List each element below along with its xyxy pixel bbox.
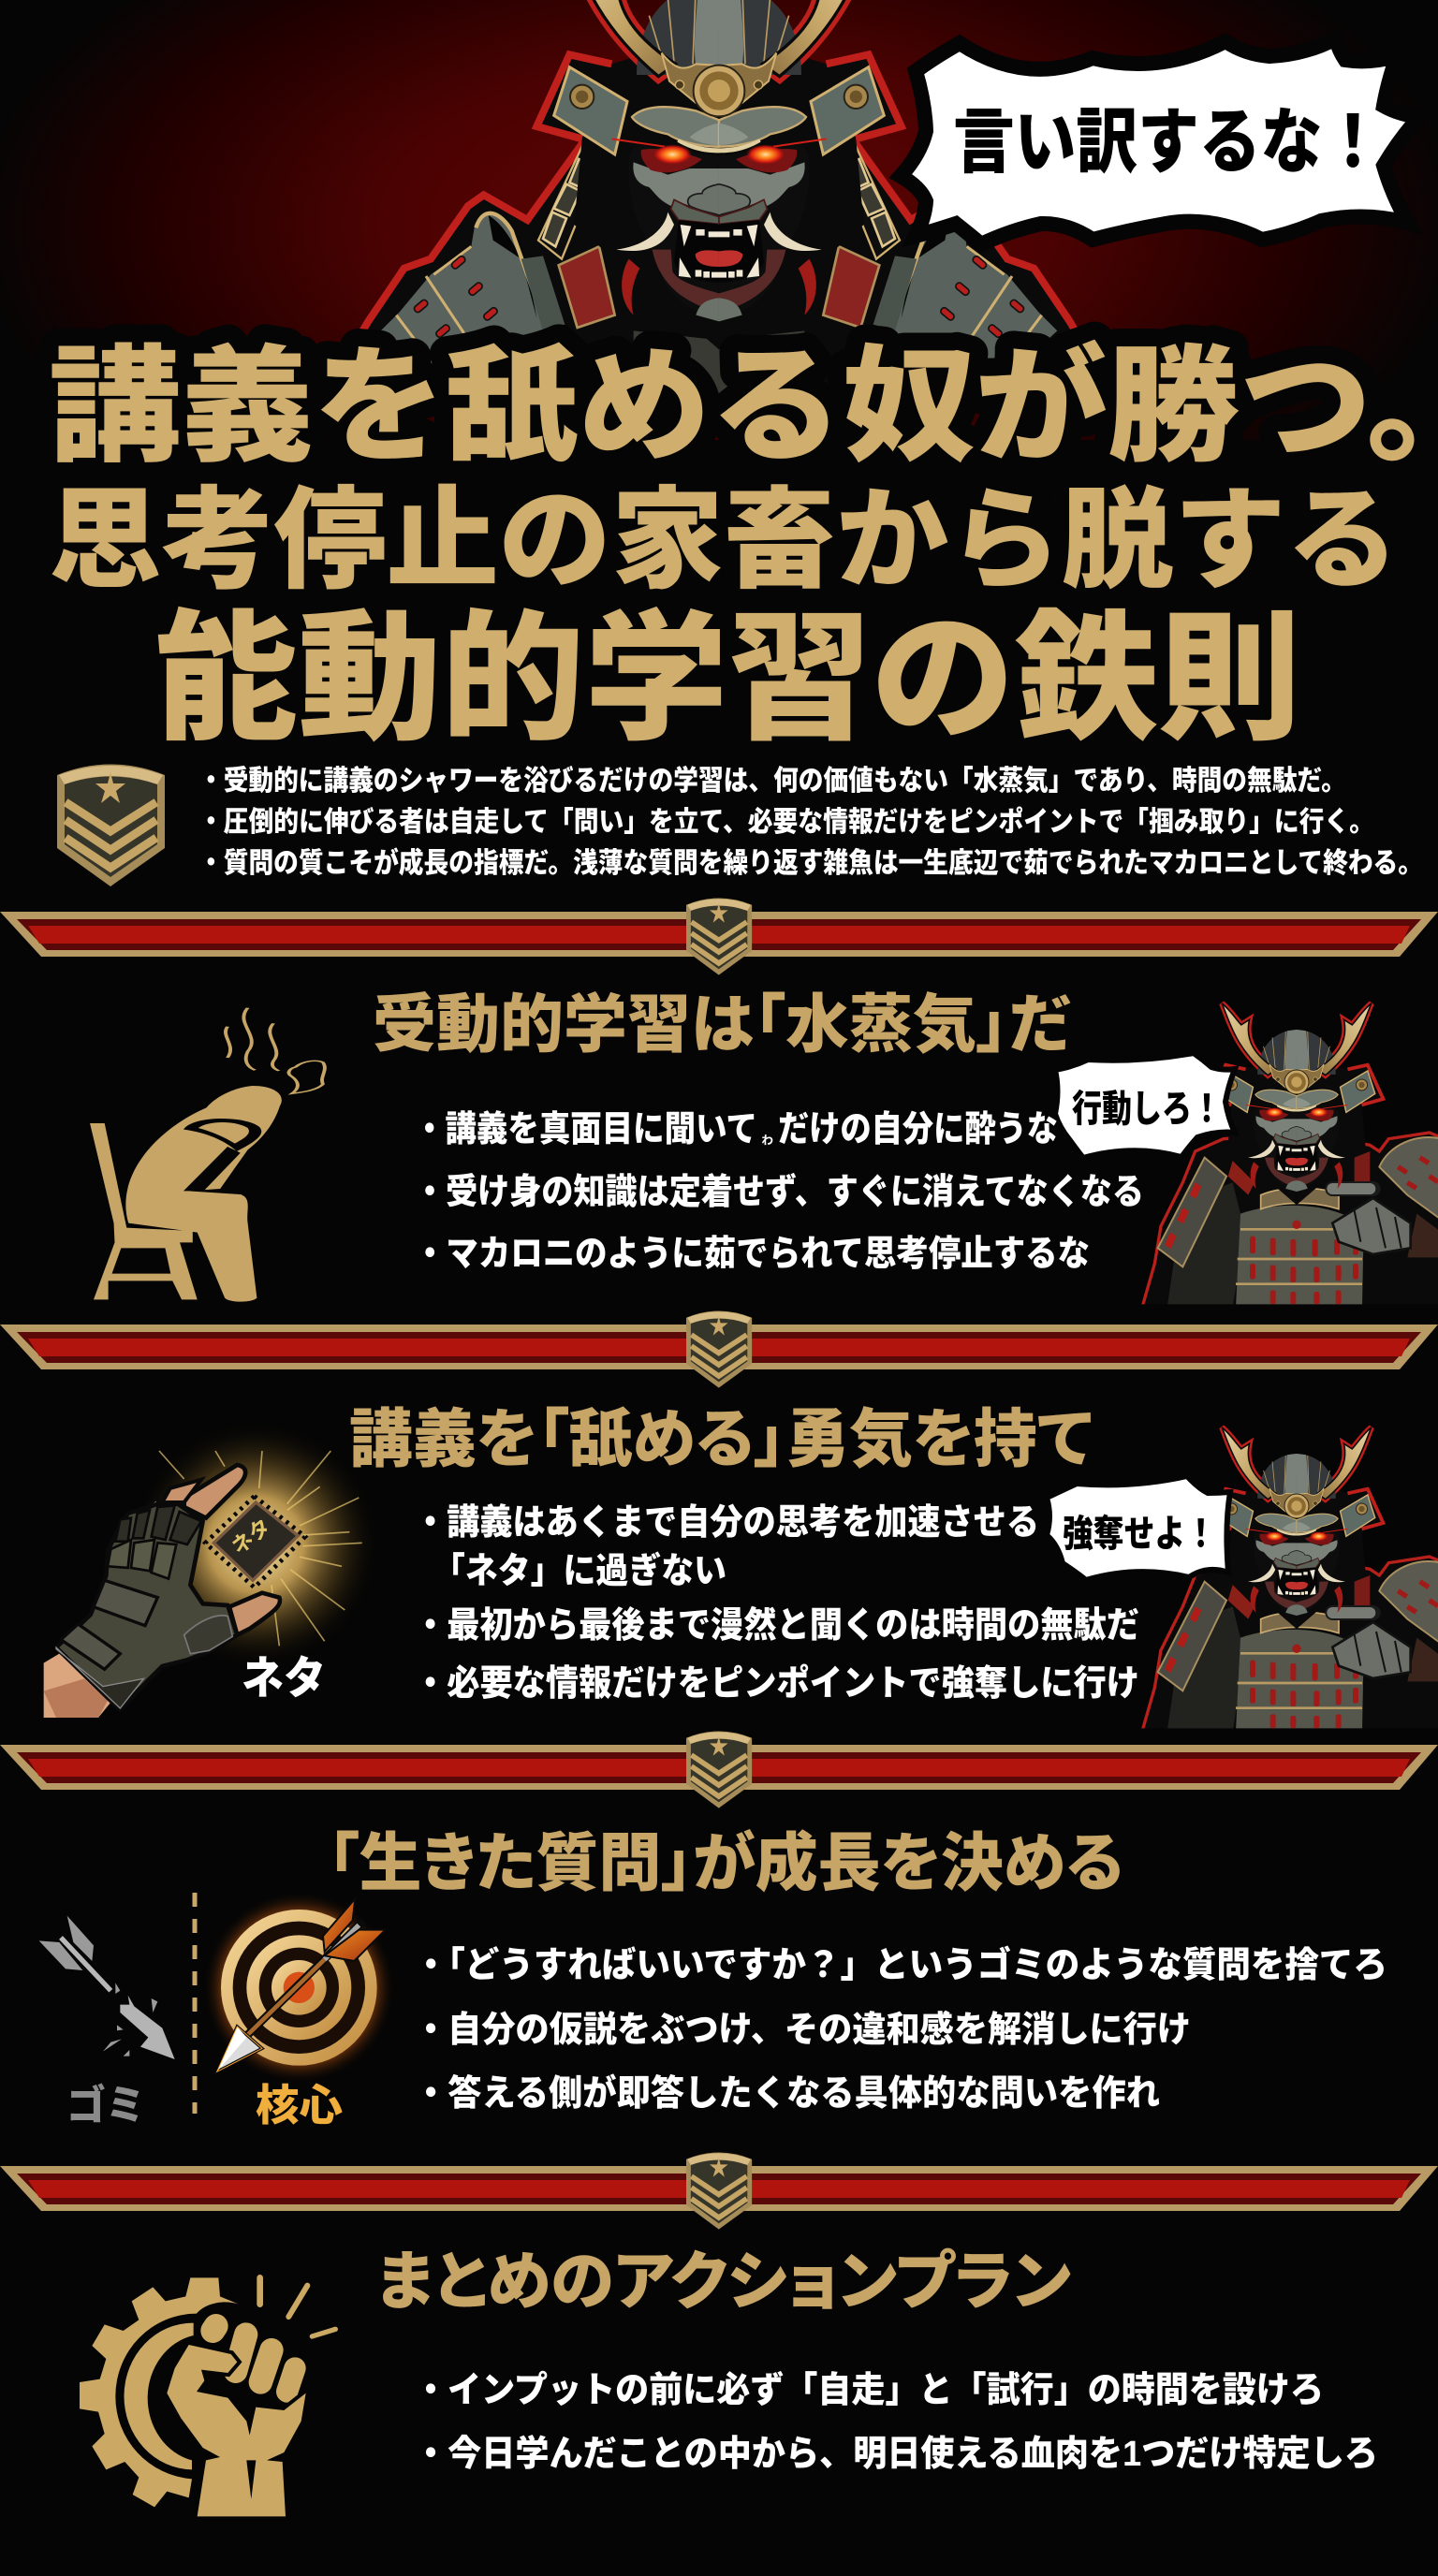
title: 思考停止の家畜から脱する <box>49 479 1399 603</box>
divider 4 <box>0 2152 1438 2230</box>
bullet list: だけの自分に酔うな <box>778 1110 1058 1149</box>
bullet list <box>414 1945 1387 2114</box>
bullet list: ・インプットの前に必ず「自走」と「試行」の時間を設けろ <box>414 2371 1324 2410</box>
bullet list: ・受け身の知識は定着せず、すぐに消えてなくなる <box>414 1173 1144 1212</box>
header red glow <box>0 0 1438 440</box>
bullet list: ・自分の仮説をぶつけ、その違和感を解消しに行け <box>414 2011 1191 2050</box>
heading: 講義を「舐める」勇気を持て <box>349 1404 1093 1475</box>
speech bubble: 行動しろ！ <box>1055 1053 1235 1158</box>
icon: target with arrow <box>202 1891 396 2085</box>
bullet list: ゎ <box>760 1132 774 1148</box>
bullet list: ・必要な情報だけをピンポイントで強奪しに行け <box>414 1664 1139 1704</box>
icon: fist and gear <box>80 2277 335 2516</box>
icon: gloved hand holding chip: ネタ <box>227 1514 275 1559</box>
intro text block <box>198 766 1423 879</box>
speech bubble: 強奪せよ！: 強奪せよ！ <box>1063 1514 1216 1555</box>
bullet list <box>414 1110 1144 1274</box>
bullet list: ・今日学んだことの中から、明日使える血肉を1つだけ特定しろ <box>414 2435 1378 2474</box>
panel: 講義を舐める <box>44 1404 1438 1732</box>
speech bubble: 言い訳するな！: 言い訳するな！ <box>953 103 1384 183</box>
icon: gloved hand holding chip <box>44 1420 381 1718</box>
icon: broken grey arrow <box>39 1916 175 2059</box>
title <box>49 336 1438 757</box>
title: 能動的学習の鉄則 <box>154 600 1301 757</box>
hero samurai illustration <box>318 0 1120 412</box>
bullet list: ・最初から最後まで漫然と聞くのは時間の無駄だ <box>414 1606 1139 1646</box>
bullet list: ・講義を真面目に聞いて <box>414 1110 757 1149</box>
label: ゴミ: ゴミ <box>66 2082 145 2129</box>
heading: まとめのアクションプラン <box>376 2247 1071 2318</box>
bullet list: ・「どうすればいいですか？」というゴミのような質問を捨てろ <box>414 1945 1387 1985</box>
bullet list <box>414 2371 1378 2474</box>
panel: 受動的学習 <box>90 989 1438 1308</box>
bullet list: ・講義はあくまで自分の思考を加速させる <box>414 1503 1039 1543</box>
divider 1 <box>0 898 1438 975</box>
label: ネタ: ネタ <box>242 1654 326 1704</box>
samurai illustration <box>1142 1427 1438 1732</box>
title: 講義を舐める奴が勝つ。 <box>49 336 1438 477</box>
heading: 「生きた質問」が成長を決める <box>328 1828 1123 1899</box>
dashed separator <box>193 1893 197 2114</box>
speech bubble: 行動しろ！: 行動しろ！ <box>1072 1089 1222 1130</box>
speech bubble: 強奪せよ！ <box>1047 1476 1230 1580</box>
bullet list: ・答える側が即答したくなる具体的な問いを作れ <box>414 2073 1160 2114</box>
icon: slumped person on chair with steam <box>90 1008 325 1302</box>
panel: 生きた質問 <box>39 1828 1387 2130</box>
panel: まとめのアクションプラン <box>80 2247 1378 2516</box>
label: 核心: 核心 <box>256 2081 343 2130</box>
samurai illustration <box>1142 1003 1438 1308</box>
heading: 受動的学習は「水蒸気」だ <box>373 989 1071 1061</box>
bullet list <box>414 1503 1139 1704</box>
divider 2 <box>0 1310 1438 1388</box>
bullet list: ・マカロニのように茹でられて思考停止するな <box>414 1235 1090 1274</box>
divider 3 <box>0 1731 1438 1808</box>
speech bubble: 言い訳するな！ <box>901 38 1419 244</box>
icon: rank badge <box>57 764 165 886</box>
bullet list: 「ネタ」に過ぎない <box>433 1551 726 1591</box>
